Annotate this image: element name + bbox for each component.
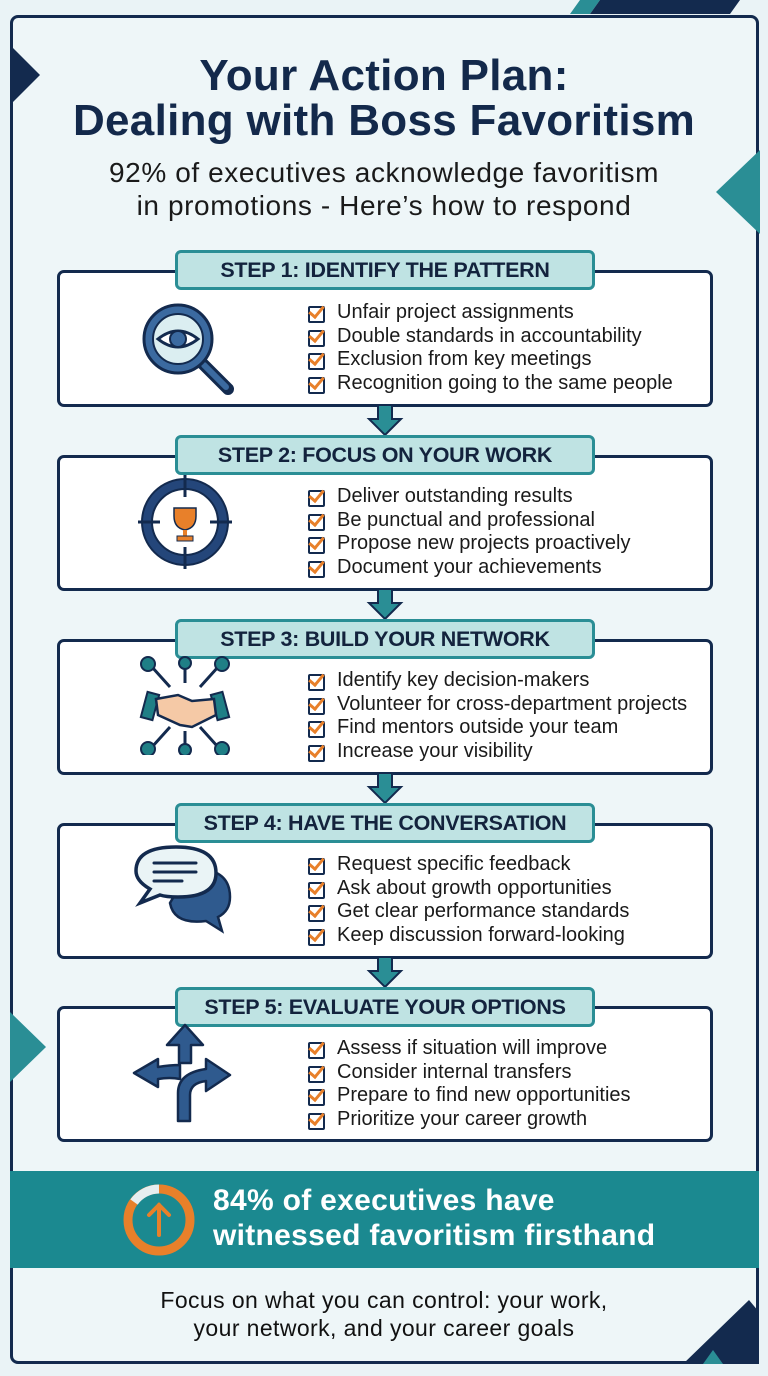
- step 4 header: [175, 803, 595, 843]
- icon: orange up ring: [124, 1184, 194, 1256]
- step 1 list: [308, 301, 673, 394]
- subtitle: [109, 157, 659, 221]
- subtitle: in promotions - Here’s how to respond: [137, 190, 631, 221]
- step 1 list: Recognition going to the same people: [337, 372, 673, 394]
- arrow 2: [366, 590, 404, 619]
- step 3 list: Identify key decision-makers: [337, 669, 589, 691]
- step 2 header: STEP 2: FOCUS ON YOUR WORK: [218, 443, 552, 467]
- step 4 list: [308, 853, 629, 946]
- decorative triangle right: [716, 150, 760, 234]
- panel: step 4: [57, 803, 713, 959]
- step 2 list: Propose new projects proactively: [337, 532, 630, 554]
- footer text: [160, 1287, 608, 1341]
- step 3 list: [308, 669, 687, 762]
- step 3 header: [175, 619, 595, 659]
- panel: step 5: [57, 987, 713, 1142]
- decorative triangle left bottom: [10, 1012, 46, 1082]
- step 4 list: Ask about growth opportunities: [337, 876, 612, 898]
- callout text: 84% of executives have: [213, 1184, 555, 1217]
- panel: step 1: [57, 250, 713, 407]
- title: [73, 51, 695, 145]
- step 4 list: Request specific feedback: [337, 853, 570, 875]
- step 5 header: STEP 5: EVALUATE YOUR OPTIONS: [204, 995, 566, 1019]
- step 3 list: Find mentors outside your team: [337, 716, 618, 738]
- step 1 list: Exclusion from key meetings: [337, 348, 592, 370]
- step 1 list: Unfair project assignments: [337, 301, 574, 323]
- icon: split arrows: [132, 1024, 232, 1122]
- footer text: Focus on what you can control: your work,: [160, 1287, 608, 1313]
- icon: speech bubbles: [134, 845, 232, 934]
- step 2 list: Be punctual and professional: [337, 508, 595, 530]
- step 5 header: [175, 987, 595, 1027]
- icon: magnifier eye: [142, 304, 234, 395]
- step 5 list: [308, 1037, 631, 1130]
- step 4 list: Get clear performance standards: [337, 900, 629, 922]
- step 5 list: Prioritize your career growth: [337, 1108, 587, 1130]
- step 2 list: Document your achievements: [337, 556, 602, 578]
- decorative triangle bottom right: [686, 1300, 759, 1364]
- step 1 header: [175, 250, 595, 290]
- step 3 header: STEP 3: BUILD YOUR NETWORK: [220, 627, 550, 651]
- step 2 list: [308, 485, 630, 578]
- title: Dealing with Boss Favoritism: [73, 96, 695, 145]
- icon: network handshake: [140, 656, 230, 755]
- footer text: your network, and your career goals: [194, 1315, 574, 1341]
- panel: step 2: [57, 435, 713, 591]
- panel: step 3: [57, 619, 713, 775]
- arrow 1: [366, 406, 404, 435]
- step 2 header: [175, 435, 595, 475]
- step 5 list: Consider internal transfers: [337, 1060, 572, 1082]
- step 1 header: STEP 1: IDENTIFY THE PATTERN: [220, 258, 550, 282]
- callout band: 84%: [10, 1171, 759, 1268]
- step 3 list: Volunteer for cross-department projects: [337, 692, 687, 714]
- subtitle: 92% of executives acknowledge favoritism: [109, 157, 659, 188]
- icon: target trophy: [138, 475, 232, 569]
- step 5 list: Prepare to find new opportunities: [337, 1084, 631, 1106]
- decorative corner: top right: [570, 0, 740, 14]
- step 2 list: Deliver outstanding results: [337, 485, 573, 507]
- arrow 4: [366, 958, 404, 987]
- arrow 3: [366, 774, 404, 803]
- title: Your Action Plan:: [199, 51, 569, 100]
- step 4 list: Keep discussion forward-looking: [337, 924, 625, 946]
- step 4 header: STEP 4: HAVE THE CONVERSATION: [204, 811, 566, 835]
- step 5 list: Assess if situation will improve: [337, 1037, 607, 1059]
- callout text: witnessed favoritism firsthand: [213, 1219, 655, 1252]
- callout text: [212, 1184, 655, 1252]
- step 3 list: Increase your visibility: [337, 740, 533, 762]
- decorative triangle left top: [13, 48, 40, 102]
- step 1 list: Double standards in accountability: [337, 324, 642, 346]
